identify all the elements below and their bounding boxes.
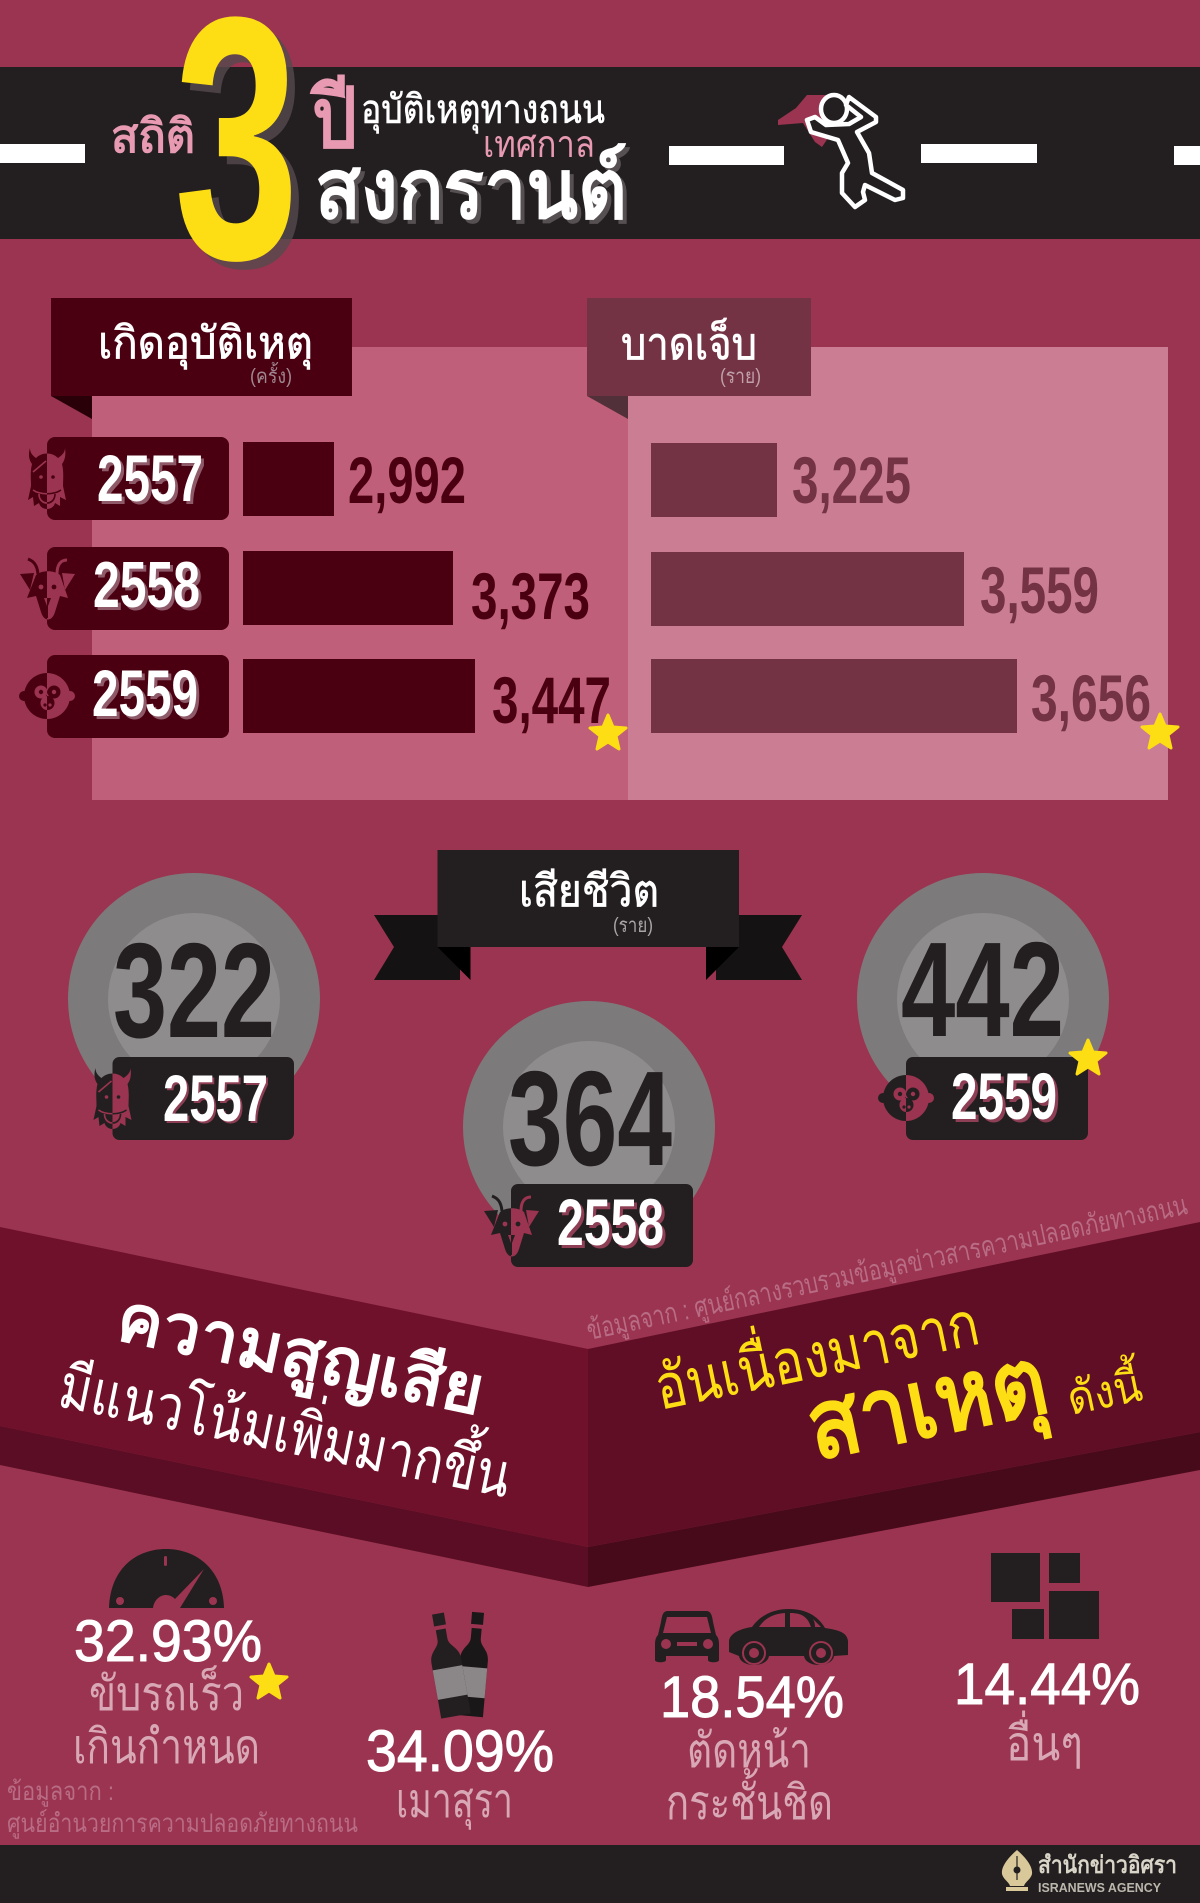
death stat 2557: 322: [113, 915, 275, 1066]
death stat 2559: 442: [901, 914, 1064, 1065]
cause: tailgating: กระชั้นชิด: [666, 1768, 833, 1830]
row 2559 accidents: 3,447: [492, 663, 611, 737]
row 2559 accidents: [19, 655, 626, 749]
icon: bottles: [423, 1611, 492, 1719]
death stat 2559: 2559: [954, 1062, 1060, 1136]
cause: speeding: [73, 1549, 287, 1774]
icon: horse: [28, 448, 66, 509]
text: causes heading: สาเหตุ: [798, 1327, 1057, 1486]
cause: drunk driving: [366, 1611, 554, 1830]
logo: Isranews Agency: [1002, 1850, 1177, 1895]
heading ribbon: deaths: เสียชีวิต: [519, 867, 659, 916]
text: causes heading: ดังนี้: [1061, 1352, 1147, 1425]
cause: drunk driving: เมาสุรา: [396, 1775, 513, 1830]
icon: horse: [94, 1068, 132, 1129]
icon: star: [251, 1664, 287, 1698]
row 2558 accidents: 3,373: [471, 559, 590, 633]
death stat 2559: 2559: [951, 1059, 1057, 1133]
row 2558 accidents: 2558: [93, 548, 200, 621]
footer bar: [0, 1845, 1200, 1903]
row 2557 accidents: [28, 437, 466, 520]
title: สถิติ: [111, 110, 195, 162]
heading ribbon: deaths: [374, 850, 802, 980]
heading banner: injuries: [587, 298, 811, 419]
panel: accidents background: [92, 347, 628, 800]
source note: bottom: ศูนย์อำนวยการความปลอดภัยทางถนน: [7, 1808, 358, 1839]
title: สงกรานต์: [315, 142, 627, 236]
heading banner: injuries: (ราย): [720, 366, 761, 388]
title: สงกรานต์: [319, 146, 631, 240]
heading ribbon: deaths: (ราย): [613, 915, 653, 937]
icon: cars: [655, 1609, 848, 1665]
road band header: [0, 67, 1200, 239]
logo: Isranews Agency: ISRANEWS AGENCY: [1038, 1881, 1162, 1895]
title: [111, 0, 631, 340]
row 2557 accidents: 2557: [100, 444, 206, 518]
heading banner: injuries: บาดเจ็บ: [621, 318, 757, 369]
death stat 2559: [857, 873, 1109, 1140]
icon: goat: [484, 1196, 539, 1256]
icon: monkey: [19, 673, 75, 719]
death stat 2558: 2558: [557, 1185, 664, 1259]
row 2557 accidents: 2557: [97, 441, 203, 515]
icon: star: [1142, 714, 1178, 748]
icon: blocks: [991, 1553, 1099, 1639]
row 2559 accidents: 2559: [92, 656, 198, 730]
logo: Isranews Agency: สำนักข่าวอิศรา: [1038, 1852, 1177, 1879]
title: เทศกาล: [483, 124, 595, 166]
text: causes heading: อันเนื่องมาจาก: [647, 1281, 985, 1424]
icon: speedometer: [109, 1549, 224, 1608]
cause: speeding: เกินกำหนด: [73, 1721, 260, 1774]
injuries bar chart: 3,559: [980, 553, 1099, 627]
cause: speeding: 32.93%: [74, 1609, 262, 1674]
text: losses trend: [53, 1279, 519, 1511]
cause: speeding: ขับรถเร็ว: [89, 1665, 244, 1721]
row 2558 accidents: 2558: [96, 551, 203, 624]
death stat 2558: 2558: [560, 1188, 667, 1262]
heading banner: accidents: [51, 298, 352, 419]
cause: other: อื่นๆ: [1006, 1710, 1083, 1771]
row 2559 accidents: 2559: [95, 659, 201, 733]
chevron band: [0, 1222, 1200, 1587]
injuries bar chart: 3,656: [1031, 661, 1151, 735]
death stat 2558: [463, 1001, 715, 1267]
injuries bar chart: [651, 443, 1178, 748]
cause: other: 14.44%: [954, 1652, 1140, 1717]
cause: tailgating: 18.54%: [660, 1665, 844, 1730]
injuries bar chart: 3,225: [792, 443, 911, 517]
icon: goat: [20, 559, 75, 620]
title: ปี: [310, 71, 357, 165]
source note: bottom: [7, 1776, 358, 1839]
icon: star: [590, 715, 626, 749]
source note: bottom: ข้อมูลจาก :: [7, 1776, 114, 1807]
title: อุบัติเหตุทางถนน: [361, 88, 605, 134]
cause: drunk driving: 34.09%: [366, 1719, 554, 1784]
death stat 2557: 2557: [165, 1063, 270, 1137]
text: losses trend: ความสูญเสีย: [110, 1279, 491, 1435]
death stat 2557: [68, 873, 320, 1140]
row 2558 accidents: [20, 547, 590, 633]
icon: accident victim outline: [778, 95, 903, 207]
row 2557 accidents: 2,992: [348, 443, 466, 517]
icon: monkey: [878, 1075, 934, 1121]
cause: tailgating: [655, 1609, 848, 1830]
heading banner: accidents: เกิดอุบัติเหตุ: [98, 319, 313, 370]
cause: other: [954, 1553, 1140, 1771]
death stat 2558: 364: [508, 1043, 672, 1194]
panel: injuries background: [628, 347, 1168, 800]
text: losses trend: มีแนวโน้มเพิ่มมากขึ้น: [53, 1341, 519, 1511]
cause: tailgating: ตัดหน้า: [687, 1725, 811, 1778]
heading banner: accidents: (ครั้ง): [250, 362, 292, 388]
icon: star: [1070, 1040, 1106, 1074]
death stat 2557: 2557: [163, 1061, 268, 1135]
text: causes heading: [647, 1281, 1147, 1486]
